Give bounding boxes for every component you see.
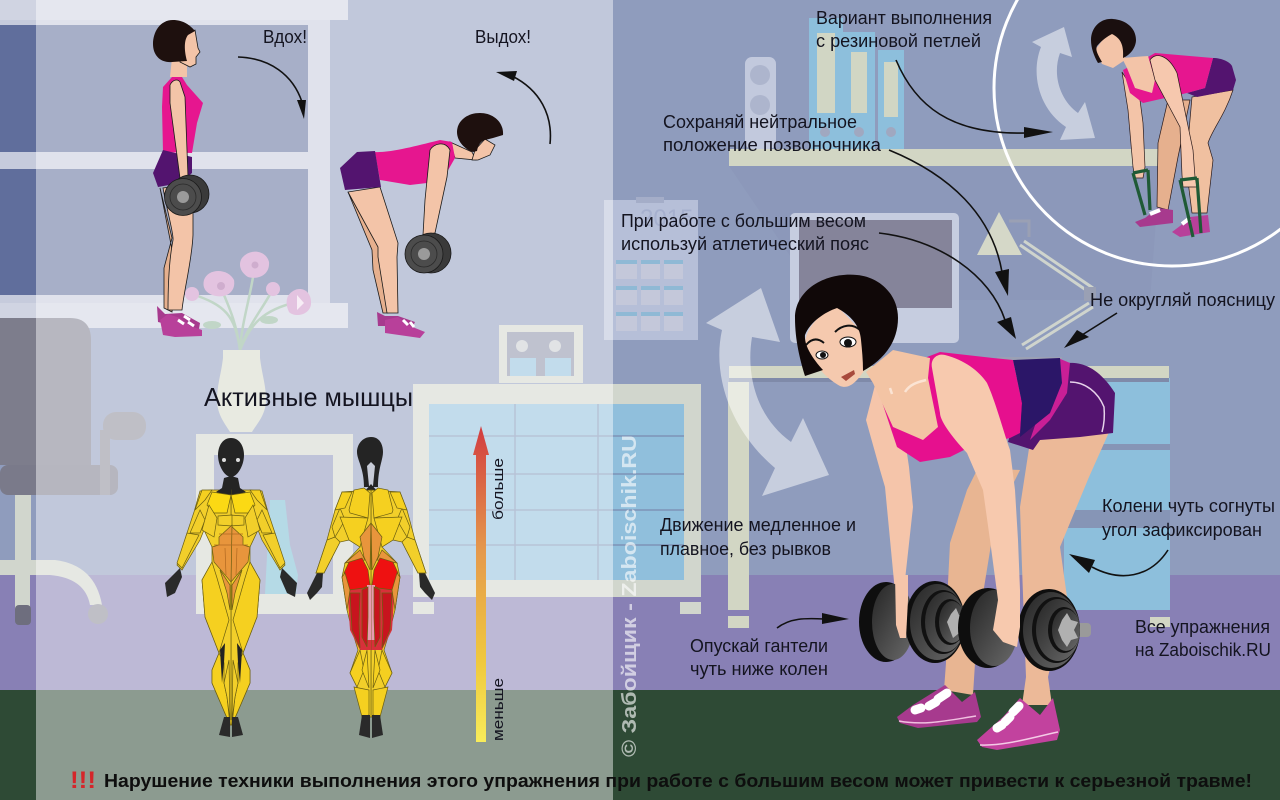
small photo frame	[499, 325, 583, 383]
figure: standing start position	[153, 20, 209, 337]
callout: knees	[1102, 496, 1275, 540]
bent: front shoe	[385, 317, 425, 338]
picture frame behind muscles	[196, 434, 353, 614]
left panel translucent overlay	[36, 0, 613, 800]
callout: lower dumbbells: чуть ниже колен	[690, 659, 828, 679]
athletic belt	[1013, 358, 1062, 437]
collarbone highlight	[890, 380, 926, 394]
bent: shorts	[340, 151, 381, 190]
callout: neutral spine: положение позвоночника	[663, 135, 882, 155]
near dumbbell	[859, 581, 965, 663]
band figure: far shoe	[1135, 208, 1173, 227]
callout: knees: Колени чуть согнуты	[1102, 496, 1275, 516]
pink top	[877, 352, 1022, 462]
far hand	[895, 575, 908, 638]
arrow: knees	[1069, 550, 1168, 576]
band figure: far arm	[1122, 72, 1145, 178]
callout: rubber band variant: Вариант выполнения	[816, 8, 992, 28]
bent: shoe straps	[403, 320, 414, 327]
front figure: right half	[230, 476, 297, 737]
standing: neck	[170, 58, 187, 77]
watermark: © Забойщик - Zaboischik.RU	[619, 435, 641, 757]
warning text: Нарушение техники выполнения этого упражнения при работе с большим весом может привести к серьезной травме!	[104, 770, 1252, 791]
band figure: rubber loops	[1133, 170, 1201, 237]
arrow: lower back	[1064, 313, 1117, 348]
band figure: shorts	[1187, 58, 1236, 97]
figure: bent-over position	[340, 113, 503, 338]
arrow: exhale	[496, 71, 550, 144]
heading: active muscles: Активные мышцы	[204, 382, 413, 412]
shorts	[1008, 363, 1115, 450]
text: inhale: Вдох!	[263, 27, 307, 47]
bent: face	[472, 139, 495, 160]
office chair	[0, 318, 146, 625]
drawer cabinet	[413, 384, 701, 614]
callout: website: на Zaboischik.RU	[1135, 640, 1271, 660]
far leg	[944, 468, 1020, 695]
monitor	[790, 213, 959, 343]
standing: front shoe	[160, 314, 202, 337]
standing: rear dumbbell plate	[171, 175, 209, 213]
callout: athletic belt: используй атлетический пояс	[621, 234, 869, 254]
wall calendar	[604, 197, 698, 340]
face	[805, 306, 866, 387]
band figure: shoe straps	[1150, 210, 1190, 224]
standing: top	[162, 77, 203, 153]
band figure: far leg	[1157, 100, 1190, 210]
callout: lower dumbbells: Опускай гантели	[690, 636, 828, 656]
band figure: hair	[1091, 19, 1136, 63]
bent: rear leg	[348, 192, 388, 313]
text: exhale: Выдох!	[475, 27, 531, 47]
standing: dumbbell	[164, 178, 202, 216]
callout: knees: угол зафиксирован	[1102, 520, 1262, 540]
small curved motion arrow	[1032, 27, 1095, 140]
band figure: near leg	[1186, 90, 1233, 213]
bent: dumbbell	[405, 235, 443, 273]
wall calendar: 2015	[640, 205, 693, 232]
desk lamp	[977, 212, 1096, 363]
standing: shorts	[153, 150, 192, 187]
back figure: head	[357, 437, 383, 487]
callout: slow movement: плавное, без рывков	[660, 539, 831, 559]
standing: rear shoe	[157, 306, 200, 329]
callout: lower dumbbells	[690, 636, 828, 679]
eyes, brows, lips	[806, 326, 860, 381]
warning marks: !!!	[70, 767, 96, 794]
standing: face	[180, 30, 200, 67]
bent: arm	[423, 144, 450, 235]
standing: rear leg	[160, 188, 176, 312]
standing: arm	[170, 80, 188, 178]
bent: top	[375, 140, 455, 185]
callout: do not round lower back: Не округляй поясницу	[1090, 290, 1275, 310]
label: less: меньше	[490, 678, 507, 741]
callout: neutral spine: Сохраняй нейтральное	[663, 112, 857, 132]
standing: front leg	[163, 185, 193, 310]
callout: rubber band variant	[816, 8, 992, 51]
front figure: left half	[165, 476, 232, 737]
arrow: lower dumbbells	[777, 613, 849, 628]
back figure: right half	[371, 488, 435, 738]
bent: hair	[457, 113, 503, 152]
main figure	[795, 275, 1115, 750]
callout: slow movement	[660, 515, 856, 559]
band figure: near arm	[1150, 56, 1197, 187]
arrow: athletic belt	[879, 233, 1016, 339]
hair	[795, 275, 898, 376]
desk	[728, 366, 1170, 628]
gradient intensity arrow	[473, 426, 489, 742]
vase with flowers	[185, 252, 311, 432]
pink side panel	[1030, 358, 1070, 440]
callout: website: Все упражнения	[1135, 617, 1270, 637]
big curved motion arrow	[706, 288, 829, 496]
arrow: rubber band variant	[896, 60, 1053, 138]
band figure: near shoe	[1172, 215, 1210, 237]
front figure: head	[218, 438, 244, 477]
callout: athletic belt	[621, 211, 869, 254]
near leg	[1020, 425, 1110, 705]
figure: rubber-band variant	[1091, 19, 1236, 237]
far shoe	[897, 685, 981, 728]
near shoe	[977, 698, 1060, 750]
far arm	[866, 385, 913, 620]
near arm	[932, 355, 1020, 647]
band figure: top	[1123, 53, 1213, 103]
band figure: face	[1095, 30, 1125, 68]
muscle chart: back figure	[307, 437, 435, 738]
standing: shoe straps	[178, 316, 194, 326]
muscle chart: front figure	[165, 438, 297, 737]
callout: neutral spine	[663, 112, 882, 155]
bent: neck	[450, 142, 476, 160]
band figure: chest	[1122, 56, 1155, 93]
callout: rubber band variant: с резиновой петлей	[816, 31, 981, 51]
chest skin	[866, 350, 938, 440]
far dumbbell	[958, 588, 1091, 671]
standing: hair	[153, 20, 195, 62]
rubber-band variant circle	[994, 0, 1280, 266]
bent: rear dumbbell plate	[411, 233, 451, 273]
shelf with binders and speaker	[729, 18, 1160, 300]
callout: website	[1135, 617, 1271, 660]
back figure: left half	[307, 488, 371, 738]
window	[0, 0, 348, 328]
bent: rear shoe	[377, 312, 415, 328]
shorts seam	[1070, 382, 1104, 432]
callout: athletic belt: При работе с большим весом	[621, 211, 866, 231]
label: more: больше	[490, 458, 507, 520]
arrow: neutral spine	[889, 150, 1009, 296]
bent: front leg	[348, 187, 398, 313]
arrow: inhale	[238, 57, 306, 119]
callout: slow movement: Движение медленное и	[660, 515, 856, 535]
